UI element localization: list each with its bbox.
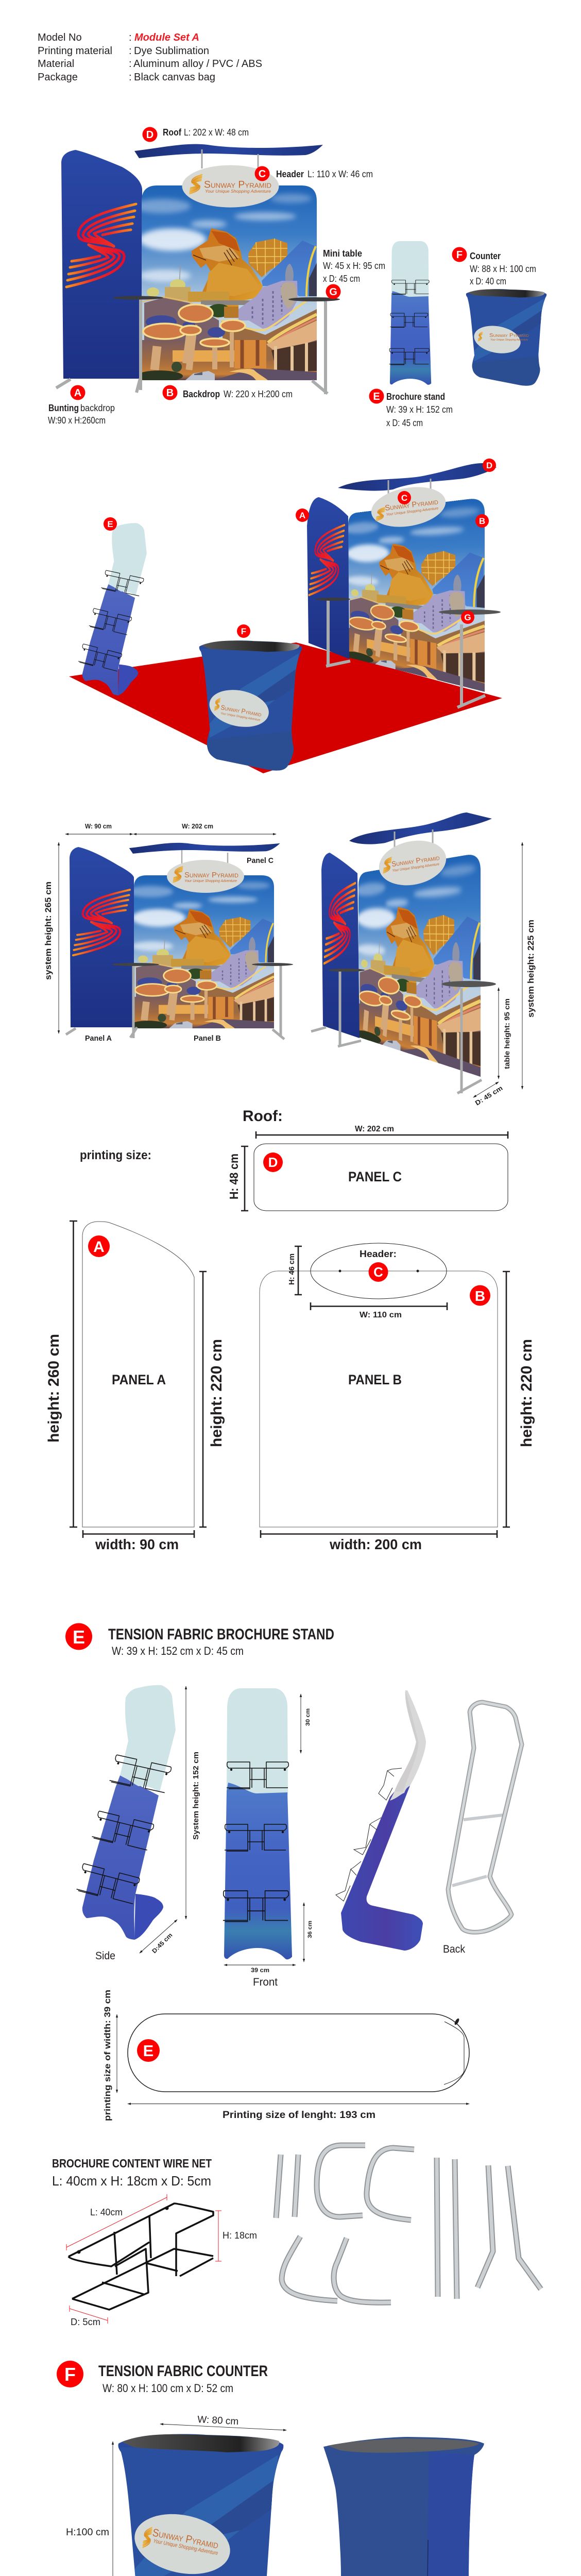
panel C template: PANEL C bbox=[348, 1169, 402, 1184]
mini table caption: W: 45 x H: 95 cm bbox=[323, 261, 385, 271]
badge D: D bbox=[146, 129, 153, 141]
side header oval: Sunway Pyramid bbox=[391, 853, 440, 868]
profile view stand bbox=[336, 1690, 426, 1951]
front view dimensions bbox=[224, 1694, 313, 1988]
header oval bbox=[167, 860, 244, 893]
counter F bbox=[466, 289, 546, 387]
badge B: B bbox=[166, 387, 174, 399]
front view dimensions: 30 cm bbox=[305, 1708, 311, 1726]
panel labels: Panel A bbox=[85, 1034, 112, 1043]
bunting caption: W:90 x H:260cm bbox=[48, 415, 106, 426]
wire net drawing bbox=[66, 2194, 257, 2327]
front counter: Your Unique Shopping Adventure bbox=[152, 2538, 218, 2556]
badge A: A bbox=[74, 387, 81, 399]
counter dimensions: H:100 cm bbox=[66, 2527, 109, 2538]
panel A template bbox=[45, 1221, 225, 1552]
fabric printing template: printing size of width: 39 cm bbox=[102, 1990, 112, 2121]
header template bbox=[287, 1243, 447, 1319]
counter on carpet bbox=[199, 640, 302, 773]
perspective badges bbox=[104, 459, 496, 638]
roof caption: L: 202 x W: 48 cm bbox=[184, 127, 249, 138]
header caption: Header bbox=[276, 169, 304, 179]
table depth dimension: D: 45 cm bbox=[474, 1084, 504, 1107]
side view stand bbox=[76, 1685, 176, 1940]
wire net drawing: L: 40cm bbox=[90, 2207, 123, 2217]
section E heading bbox=[65, 1623, 334, 1657]
spec list: Dye Sublimation bbox=[134, 45, 209, 57]
side rods bbox=[395, 829, 433, 848]
spec list: : bbox=[129, 58, 132, 70]
perspective badges: F bbox=[241, 626, 246, 636]
brochure caption: Brochure stand bbox=[386, 392, 445, 402]
badge C: C bbox=[259, 168, 266, 180]
spec list: Package bbox=[38, 72, 78, 83]
wire net drawing: H: 18cm bbox=[223, 2230, 257, 2241]
side header oval: Your Unique Shopping Adventure bbox=[392, 862, 439, 873]
perspective badges: C bbox=[401, 493, 407, 503]
counter caption: x D: 40 cm bbox=[470, 276, 506, 286]
side S logo bbox=[324, 883, 355, 963]
red carpet bbox=[69, 642, 502, 773]
header oval C: Your Unique Shopping Adventure bbox=[205, 189, 271, 194]
backdrop graphic B bbox=[134, 185, 317, 382]
panel C template bbox=[227, 1125, 508, 1211]
panel labels bbox=[85, 856, 274, 1043]
frame tubes bbox=[276, 2145, 541, 2302]
panel C template: W: 202 cm bbox=[355, 1125, 394, 1133]
table height dimension: table height: 95 cm bbox=[503, 998, 511, 1069]
panel B template: height: 220 cm bbox=[518, 1339, 535, 1447]
brochure stand E bbox=[389, 241, 431, 385]
backdrop caption bbox=[183, 389, 293, 399]
front view dimensions: 39 cm bbox=[251, 1967, 269, 1974]
bunting caption: backdrop bbox=[80, 403, 115, 413]
badge E bbox=[369, 388, 384, 404]
system height dimension: system height: 265 cm bbox=[43, 882, 53, 980]
spec list bbox=[38, 32, 262, 83]
side tables bbox=[311, 969, 496, 1093]
perspective roof rods bbox=[388, 479, 431, 494]
header oval: Your Unique Shopping Adventure bbox=[184, 879, 237, 883]
perspective badges: E bbox=[107, 519, 113, 529]
side view dimensions bbox=[95, 1686, 200, 1962]
overview badges and captions bbox=[48, 127, 536, 428]
panel C roof bbox=[129, 843, 280, 854]
badge F bbox=[452, 247, 467, 262]
counter on carpet: Sunway Pyramid bbox=[220, 703, 262, 718]
side header oval bbox=[375, 835, 450, 891]
perspective bunting bbox=[307, 497, 349, 659]
wire net bbox=[52, 2145, 541, 2327]
side view dimensions: Side bbox=[95, 1950, 115, 1962]
wire net heading: L: 40cm x H: 18cm x D: 5cm bbox=[52, 2173, 211, 2189]
perspective header oval: Your Unique Shopping Adventure bbox=[386, 507, 439, 517]
header oval: Sunway Pyramid bbox=[184, 871, 238, 879]
panel B template: PANEL B bbox=[348, 1372, 402, 1387]
back frame bbox=[448, 1702, 522, 1932]
badge D bbox=[142, 127, 158, 142]
header caption bbox=[276, 169, 373, 179]
bunting caption bbox=[48, 403, 115, 426]
section F heading: F bbox=[64, 2364, 76, 2385]
header template: H: 46 cm bbox=[287, 1253, 296, 1285]
mini tables G bbox=[56, 296, 340, 394]
perspective header oval: Sunway Pyramid bbox=[384, 497, 439, 513]
panel B graphic bbox=[128, 875, 274, 1029]
perspective roof bbox=[338, 463, 497, 491]
badge G: G bbox=[329, 286, 337, 298]
panel labels: Panel B bbox=[194, 1034, 221, 1043]
badge G bbox=[326, 284, 341, 299]
spec list: Model No bbox=[38, 32, 82, 43]
spec list: Module Set A bbox=[134, 32, 199, 43]
mini table caption: Mini table bbox=[323, 248, 362, 259]
back counter bbox=[323, 2437, 484, 2576]
panel A template: width: 90 cm bbox=[95, 1536, 179, 1552]
side dimension view bbox=[311, 812, 536, 1107]
section F heading: W: 80 x H: 100 cm x D: 52 cm bbox=[102, 2382, 233, 2395]
header template: Header: bbox=[360, 1249, 397, 1259]
width dimensions: W: 202 cm bbox=[182, 822, 213, 830]
system height dimension: system height: 225 cm bbox=[526, 920, 536, 1018]
header caption: L: 110 x W: 46 cm bbox=[307, 169, 373, 179]
counter caption bbox=[470, 251, 536, 286]
badge A bbox=[70, 385, 86, 400]
mini table caption: x D: 45 cm bbox=[323, 274, 360, 284]
section F heading: TENSION FABRIC COUNTER bbox=[98, 2363, 268, 2380]
side roof bbox=[349, 812, 492, 844]
panel C template: D bbox=[268, 1155, 278, 1170]
side bunting bbox=[321, 853, 360, 1038]
front counter bbox=[118, 2434, 283, 2576]
perspective badges: D bbox=[486, 461, 492, 470]
counter caption: W: 88 x H: 100 cm bbox=[470, 264, 536, 274]
bunting caption: Bunting bbox=[48, 403, 79, 413]
brochure caption bbox=[386, 392, 453, 428]
side view dimensions: System height: 152 cm bbox=[192, 1752, 200, 1840]
width dimensions: W: 90 cm bbox=[85, 822, 112, 830]
spec list: : bbox=[129, 72, 132, 83]
panel A template: PANEL A bbox=[112, 1372, 166, 1387]
roof caption: Roof bbox=[163, 127, 182, 138]
panel C template: H: 48 cm bbox=[227, 1154, 241, 1199]
mini table caption bbox=[323, 248, 385, 284]
side view dimensions: D:45 cm bbox=[150, 1931, 174, 1955]
perspective tables bbox=[315, 598, 501, 707]
overview front booth bbox=[56, 144, 546, 394]
section E heading: W: 39 x H: 152 cm x D: 45 cm bbox=[112, 1645, 244, 1657]
panel A bunting bbox=[70, 847, 135, 1027]
wire net drawing: D: 5cm bbox=[71, 2317, 100, 2327]
header template: W: 110 cm bbox=[360, 1311, 402, 1319]
panel A template: height: 220 cm bbox=[208, 1339, 225, 1447]
panel A template: A bbox=[93, 1239, 105, 1256]
counter F: Your Unique Shopping Adventure bbox=[490, 338, 528, 342]
counter dimensions bbox=[66, 2414, 319, 2576]
counter dimensions: W: 80 cm bbox=[197, 2414, 239, 2427]
spec list: Aluminum alloy / PVC / ABS bbox=[133, 58, 262, 70]
roof rods bbox=[182, 850, 228, 866]
header oval C bbox=[182, 165, 279, 208]
counter caption: Counter bbox=[470, 251, 501, 261]
width dimensions bbox=[65, 822, 276, 834]
header oval C: Sunway Pyramid bbox=[204, 179, 271, 191]
badge F: F bbox=[456, 249, 463, 261]
section F: counter bbox=[57, 2361, 484, 2576]
badge E: E bbox=[373, 391, 380, 402]
fabric printing template: Printing size of lenght: 193 cm bbox=[223, 2110, 375, 2121]
spec list: : bbox=[129, 32, 132, 43]
roof caption bbox=[163, 127, 249, 138]
perspective booth view bbox=[78, 459, 501, 773]
section F heading bbox=[57, 2361, 268, 2395]
tables bbox=[66, 963, 293, 1039]
counter on carpet: Your Unique Shopping Adventure bbox=[220, 712, 261, 722]
panel B template bbox=[260, 1271, 535, 1552]
section E: brochure stand bbox=[65, 1623, 522, 2121]
front counter: Sunway Pyramid bbox=[151, 2527, 219, 2551]
printing size templates bbox=[45, 1108, 535, 1552]
counter F: Sunway Pyramid bbox=[489, 333, 529, 338]
badge C bbox=[254, 166, 270, 181]
perspective badges: G bbox=[464, 613, 471, 622]
panel labels: Panel C bbox=[247, 856, 274, 865]
fabric printing template bbox=[102, 1990, 469, 2121]
bunting panel A bbox=[61, 150, 143, 379]
section E heading: E bbox=[73, 1626, 85, 1648]
brochure caption: W: 39 x H: 152 cm bbox=[386, 404, 453, 415]
panel B template: width: 200 cm bbox=[329, 1536, 422, 1552]
backdrop caption: Backdrop bbox=[183, 389, 220, 399]
header template: C bbox=[373, 1264, 383, 1280]
perspective S logo bbox=[309, 525, 345, 595]
panel B template: B bbox=[475, 1288, 485, 1304]
roof rods bbox=[202, 149, 258, 168]
printing size heading: printing size: bbox=[80, 1148, 151, 1162]
section E heading: TENSION FABRIC BROCHURE STAND bbox=[108, 1626, 334, 1643]
badge B bbox=[163, 385, 177, 400]
panel A template: height: 260 cm bbox=[45, 1334, 62, 1443]
spec list: Material bbox=[38, 58, 74, 70]
front view dimensions: 36 cm bbox=[307, 1921, 313, 1938]
back label: Back bbox=[443, 1943, 465, 1955]
wire net heading: BROCHURE CONTENT WIRE NET bbox=[52, 2157, 212, 2170]
spec list: : bbox=[129, 45, 132, 57]
front dimension view bbox=[43, 822, 293, 1043]
perspective badges: A bbox=[299, 511, 305, 520]
brochure caption: x D: 45 cm bbox=[386, 418, 423, 428]
front view stand bbox=[223, 1688, 292, 1959]
backdrop graphic: perspective booth view bbox=[348, 499, 485, 692]
front view dimensions: Front bbox=[253, 1976, 278, 1988]
backdrop caption: W: 220 x H:200 cm bbox=[224, 389, 293, 399]
S logo bbox=[73, 890, 130, 955]
side brochure stand on carpet bbox=[78, 523, 147, 696]
perspective header oval bbox=[368, 482, 449, 532]
backdrop graphic: side dimension view bbox=[358, 854, 481, 1077]
spec list: Black canvas bag bbox=[134, 72, 215, 83]
roof D bbox=[134, 144, 323, 158]
roof heading: Roof: bbox=[243, 1108, 283, 1125]
perspective badges: B bbox=[479, 516, 485, 526]
spec list: Printing material bbox=[38, 45, 112, 57]
fabric printing template: E bbox=[143, 2042, 153, 2060]
wire net heading bbox=[52, 2157, 212, 2189]
bunting S logo bbox=[66, 204, 136, 287]
